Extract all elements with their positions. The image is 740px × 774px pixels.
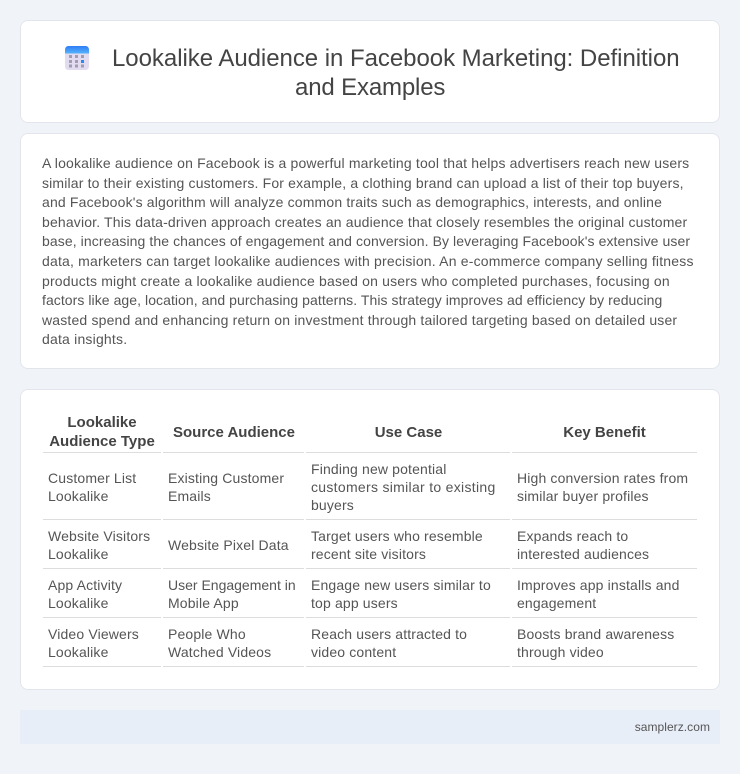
table row: customer list lookalike: customers similar to existing — [311, 479, 496, 495]
table row: video viewers lookalike: Boosts brand awareness — [517, 626, 674, 642]
title: Lookalike Audience in Facebook Marketing: Definition — [112, 45, 680, 72]
text block: description: behavior. This data-driven approach creates an audience that closely resembles the original customer — [42, 214, 687, 230]
table row: video viewers lookalike: Watched Videos — [168, 644, 271, 660]
header: source audience: Source Audience — [173, 424, 295, 441]
table row: customer list lookalike: Emails — [168, 488, 211, 504]
header: lookalike audience type: Lookalike — [67, 414, 137, 431]
panel: title card — [20, 20, 720, 123]
panel: description card — [20, 133, 720, 369]
text block: description: data, marketers can target lookalike audiences with precision. An e-commerce company selling fitness — [42, 253, 694, 269]
header: lookalike audience type: Audience Type — [49, 433, 155, 450]
table row: customer list lookalike — [48, 461, 688, 513]
table row: video viewers lookalike: Reach users attracted to — [311, 626, 467, 642]
table row: app activity lookalike: Mobile App — [168, 595, 239, 611]
footer text: samplerz.com: samplerz.com — [635, 720, 710, 734]
table row: website visitors lookalike: Website Visitors — [48, 528, 150, 544]
header: key benefit: Key Benefit — [563, 424, 646, 441]
panel: table card — [20, 389, 720, 690]
table row: website visitors lookalike — [48, 528, 649, 562]
header: lookalike audience type — [49, 414, 155, 450]
table row: video viewers lookalike: video content — [311, 644, 396, 660]
title: and Examples — [295, 74, 445, 101]
table row: customer list lookalike: High conversion rates from — [517, 470, 688, 486]
title — [112, 45, 680, 101]
table row: app activity lookalike — [48, 577, 680, 611]
table row: website visitors lookalike: recent site visitors — [311, 546, 426, 562]
table row: app activity lookalike: User Engagement in — [168, 577, 296, 593]
table row: video viewers lookalike: Lookalike — [48, 644, 109, 660]
table row: video viewers lookalike — [48, 626, 674, 660]
text block: description: products might create a lookalike audience based on users who completed purchases, focusing on — [42, 273, 670, 289]
table row: app activity lookalike: Engage new users similar to — [311, 577, 491, 593]
text block: description: and Facebook's algorithm will analyze common traits such as demographics, interests, and online — [42, 194, 662, 210]
table row: customer list lookalike: Existing Customer — [168, 470, 284, 486]
table row: video viewers lookalike: through video — [517, 644, 604, 660]
table row: website visitors lookalike: Lookalike — [48, 546, 109, 562]
table row: customer list lookalike: Finding new potential — [311, 461, 446, 477]
table row: customer list lookalike: Lookalike — [48, 488, 109, 504]
icon: calendar — [65, 46, 89, 70]
text block: description: wasted spend and enhancing return on investment through tailored targeting based on detailed user — [42, 312, 677, 328]
table row: website visitors lookalike: Target users who resemble — [311, 528, 483, 544]
text block: description: data insights. — [42, 331, 127, 347]
table row: customer list lookalike: similar buyer profiles — [517, 488, 649, 504]
table row: video viewers lookalike: Video Viewers — [48, 626, 139, 642]
table header — [49, 414, 646, 450]
text block: description: similar to their existing customers. For example, a clothing brand can upload a list of their top buyers, — [42, 175, 684, 191]
table row: app activity lookalike: App Activity — [48, 577, 122, 593]
header: use case: Use Case — [375, 424, 442, 441]
table row: app activity lookalike: top app users — [311, 595, 398, 611]
table row: app activity lookalike: Lookalike — [48, 595, 109, 611]
table row: app activity lookalike: engagement — [517, 595, 596, 611]
text block: description: base, increasing the chances of engagement and conversion. By leveraging Facebook's extensive user — [42, 233, 690, 249]
text block: description: A lookalike audience on Facebook is a powerful marketing tool that helps advertisers reach new users — [42, 155, 689, 171]
table row: website visitors lookalike: Website Pixel Data — [168, 537, 289, 553]
table row: website visitors lookalike: interested audiences — [517, 546, 649, 562]
table row: app activity lookalike: Improves app installs and — [517, 577, 680, 593]
footer bar — [20, 710, 720, 744]
table row: customer list lookalike: buyers — [311, 497, 354, 513]
table row: website visitors lookalike: Expands reach to — [517, 528, 628, 544]
table row: video viewers lookalike: People Who — [168, 626, 246, 642]
table row: customer list lookalike: Customer List — [48, 470, 136, 486]
text block: description — [42, 155, 694, 347]
text block: description: factors like age, location, and purchasing patterns. This strategy improves ad efficiency by reducing — [42, 292, 662, 308]
